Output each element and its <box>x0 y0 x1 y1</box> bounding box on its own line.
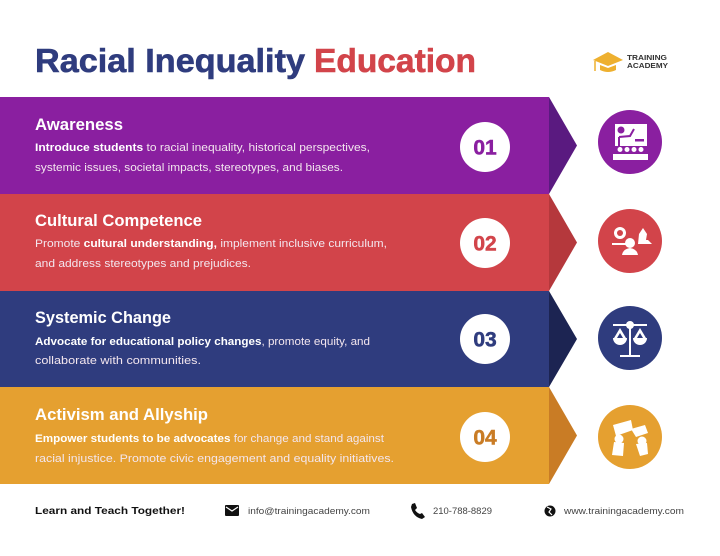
email: info@trainingacademy.com <box>248 506 370 517</box>
text: systemic change description: collaborate with communities. <box>35 355 201 367</box>
number 02: 02 <box>473 232 497 256</box>
website: www.trainingacademy.com <box>563 506 684 517</box>
number 03 <box>460 314 510 364</box>
panel: systemic change <box>0 291 577 387</box>
logo: training academy: TRAINING <box>627 53 667 62</box>
title: Education <box>314 42 476 79</box>
icon: people <box>598 209 662 273</box>
footer slogan: Learn and Teach Together! <box>35 505 185 517</box>
text: awareness description: systemic issues, societal impacts, stereotypes, and biases. <box>35 162 343 174</box>
logo: training academy: ACADEMY <box>627 61 668 70</box>
heading: activism and allyship: Activism and Allyship <box>35 405 208 424</box>
title <box>35 42 476 79</box>
heading: awareness: Awareness <box>35 115 123 134</box>
panel: awareness <box>0 97 577 194</box>
number 03: 03 <box>473 328 497 352</box>
phone number: 210-788-8829 <box>433 506 492 517</box>
text: activism description: Empower students to be advocates for change and stand against <box>35 433 375 445</box>
text: activism description: racial injustice. Promote civic engagement and equality initiatives. <box>35 453 394 465</box>
icon: globe <box>544 506 556 516</box>
number 02 <box>460 218 510 268</box>
text: awareness description: Introduce students to racial inequality, historical perspectives, <box>35 142 351 154</box>
heading: systemic change: Systemic Change <box>35 308 171 327</box>
logo: training academy <box>593 52 668 72</box>
footer <box>35 503 684 519</box>
number 04 <box>460 412 510 462</box>
icon: envelope <box>225 505 239 516</box>
icon: scales <box>598 306 662 370</box>
title: Racial Inequality <box>35 42 306 79</box>
icon: classroom <box>598 110 662 174</box>
number 01 <box>460 122 510 172</box>
panel: activism and allyship <box>0 387 577 484</box>
icon: raised fists <box>598 405 662 469</box>
text: cultural competence description: Promote cultural understanding, implement inclusive curriculum, <box>35 238 373 250</box>
heading: cultural competence: Cultural Competence <box>35 211 202 230</box>
number 01: 01 <box>473 136 497 160</box>
icon: phone <box>411 503 425 519</box>
number 04: 04 <box>473 426 497 450</box>
text: cultural competence description: and address stereotypes and prejudices. <box>35 258 251 270</box>
panel: cultural competence <box>0 194 577 291</box>
text: systemic change description: Advocate for educational policy changes , promote equity, and <box>35 336 364 348</box>
